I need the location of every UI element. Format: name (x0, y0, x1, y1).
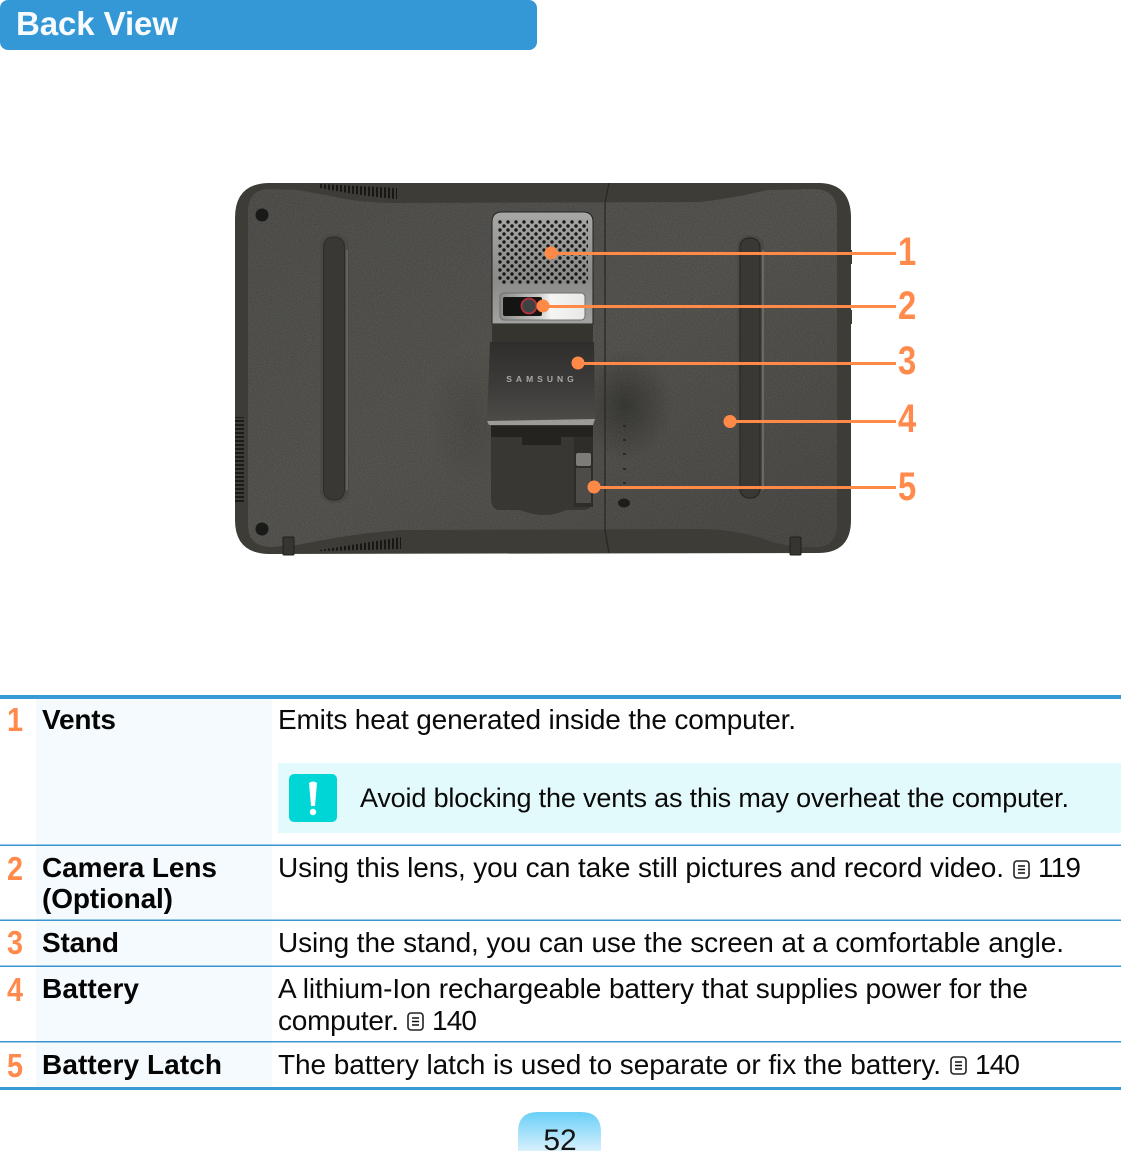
row 4: battery (7, 971, 1028, 1036)
left slot (320, 234, 349, 503)
row 4: battery: Battery (42, 973, 139, 1004)
row 4: battery: A lithium-Ion rechargeable battery that supplies power for the (278, 973, 1028, 1004)
table: component descriptions (0, 695, 1121, 1090)
row 2: camera lens: 2 (7, 850, 23, 887)
stand (487, 342, 595, 421)
row 5: battery latch: Battery Latch (42, 1049, 222, 1080)
seam (605, 183, 609, 553)
warning note (278, 763, 1121, 833)
screws (256, 208, 268, 222)
device photo: back of computer: SAMSUNG (506, 374, 578, 384)
row 2: camera lens: (Optional) (42, 883, 173, 914)
stand neck (492, 324, 593, 343)
row 3: stand: Using the stand, you can use the screen at a comfortable angle. (278, 927, 1064, 958)
page number tab (518, 1112, 601, 1151)
camera strip (500, 293, 585, 320)
row 4: battery: computer. (278, 1005, 399, 1036)
row 3: stand: 3 (7, 924, 23, 961)
indicator holes and mic (623, 425, 626, 484)
right slot (737, 235, 764, 501)
row 2: camera lens: Using this lens, you can take still pictures and record video. (278, 852, 1004, 883)
icon: exclamation (289, 774, 337, 822)
row 1: vents: Vents (42, 704, 116, 735)
warning note: Avoid blocking the vents as this may overheat the computer. (360, 783, 1069, 813)
vent grilles (320, 184, 397, 199)
row 1: vents (7, 701, 1121, 833)
row 5: battery latch: The battery latch is used to separate or fix the battery. (278, 1049, 941, 1080)
callout 4: battery: 4 (898, 396, 917, 441)
row 2: camera lens: 119 (1038, 852, 1081, 883)
row 2: camera lens: Camera Lens (42, 852, 217, 883)
row 5: battery latch (7, 1047, 1020, 1084)
row 1: vents: Emits heat generated inside the computer. (278, 704, 796, 735)
heading: Back View (0, 0, 537, 50)
side buttons (849, 250, 852, 264)
callout 3: stand: 3 (898, 338, 916, 383)
callout 5: battery latch: 5 (898, 464, 916, 509)
callout 1: vents: 1 (898, 229, 916, 274)
row 4: battery: 4 (7, 971, 24, 1008)
callout 2: camera lens (536, 283, 916, 328)
row 2: camera lens (7, 850, 1081, 914)
callout 4: battery (724, 396, 917, 441)
callout 5: battery latch (588, 464, 916, 509)
row 3: stand (7, 924, 1064, 961)
feet (283, 537, 294, 555)
row 4: battery: 140 (432, 1005, 477, 1036)
battery bay (491, 425, 593, 515)
callout 1: vents (544, 229, 916, 274)
vent plate (492, 212, 593, 324)
callout 3: stand (572, 338, 916, 383)
row 1: vents: 1 (7, 701, 23, 738)
battery latch (574, 437, 593, 507)
row 5: battery latch: 5 (7, 1047, 23, 1084)
device textured back panel (248, 189, 837, 547)
row 5: battery latch: 140 (975, 1049, 1020, 1080)
heading: Back View: Back View (16, 5, 178, 42)
name column background (36, 697, 272, 1089)
row 3: stand: Stand (42, 927, 119, 958)
device photo: back of computer (235, 183, 852, 555)
device outer shell (235, 183, 851, 554)
callout 2: camera lens: 2 (898, 283, 916, 328)
